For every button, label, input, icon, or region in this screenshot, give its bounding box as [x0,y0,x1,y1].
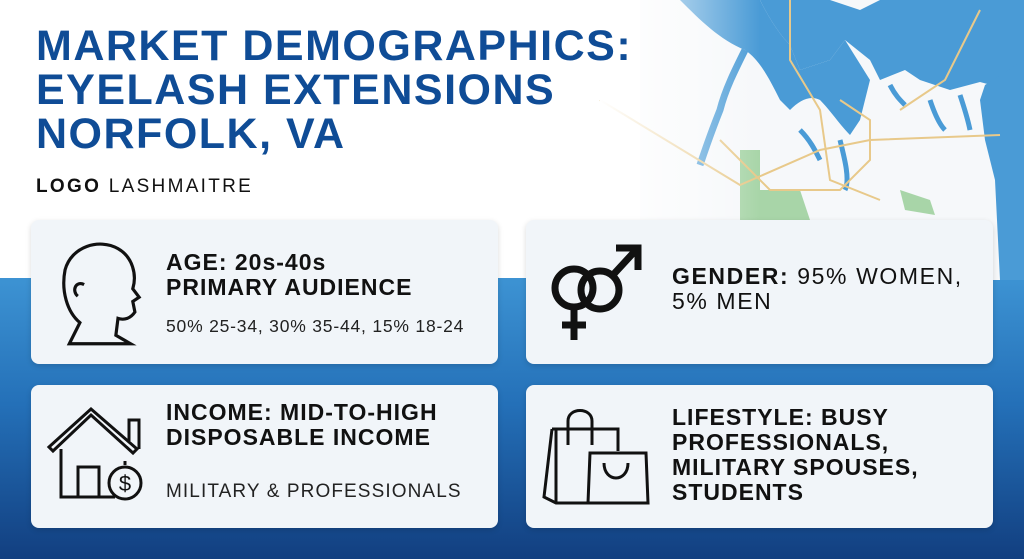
icon: shopping bags [542,409,650,504]
heading: lifestyle: STUDENTS [672,479,804,505]
title: MARKET DEMOGRAPHICS: [36,22,632,70]
heading: lifestyle: PROFESSIONALS, [672,429,889,455]
heading: gender: GENDER: 95% WOMEN, [672,263,963,289]
heading: income: INCOME: MID-TO-HIGH [166,399,438,425]
heading: income: DISPOSABLE INCOME [166,424,431,450]
text: age breakdown: 50% 25-34, 30% 35-44, 15% 18-24 [166,316,464,336]
panel: income [31,385,498,528]
heading: income [166,399,438,450]
panel: gender [526,220,993,364]
heading: age: AGE: 20s-40s [166,249,326,275]
title: EYELASH EXTENSIONS [36,66,555,114]
heading: gender: 5% MEN [672,288,772,314]
heading: lifestyle [672,404,919,505]
map [600,0,1024,280]
icon: house with dollar: $ [119,471,131,496]
icon: head profile [62,242,142,346]
heading: age: PRIMARY AUDIENCE [166,274,412,300]
logo text: LOGO LASHMAITRE [36,176,253,197]
icon: gender symbols [552,244,642,340]
heading: gender [672,263,963,314]
panel: age [31,220,498,364]
icon: house with dollar [46,407,142,500]
heading: lifestyle: LIFESTYLE: BUSY [672,404,889,430]
text: income: MILITARY & PROFESSIONALS [166,481,462,502]
panel: lifestyle [526,385,993,528]
title [36,22,632,158]
title: NORFOLK, VA [36,110,346,158]
heading: lifestyle: MILITARY SPOUSES, [672,454,919,480]
heading: age [166,249,412,300]
